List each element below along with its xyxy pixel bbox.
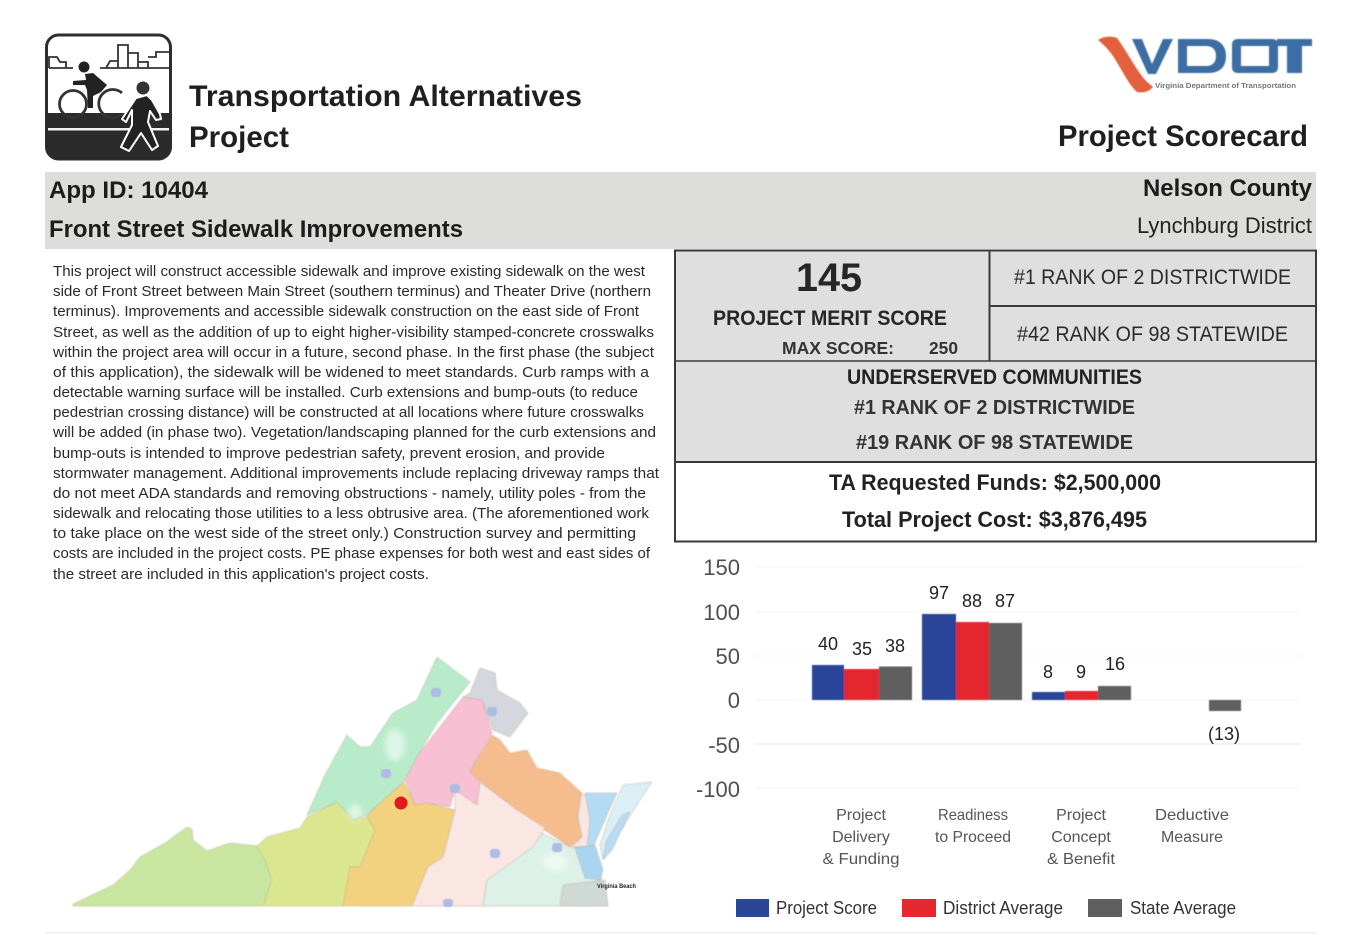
- y axis labels: 0: [728, 688, 740, 713]
- title: Transportation Alternatives: [189, 80, 582, 113]
- district: Northern Virginia: [463, 668, 528, 737]
- y axis labels: 50: [716, 644, 740, 669]
- district: Middle Peninsula strip: [572, 795, 590, 847]
- panel: score table: #1 RANK OF 2 DISTRICTWIDE: [1014, 266, 1291, 289]
- category labels: Project: [836, 807, 886, 824]
- text block: project description: to take place on the west side of the street only.) Construction survey and permitting: [53, 526, 636, 542]
- category labels: Delivery: [832, 829, 890, 846]
- district: South Hampton: [560, 880, 608, 906]
- header band: Lynchburg District: [1137, 213, 1312, 238]
- district: Lynchburg: [343, 782, 455, 906]
- text block: project description: pedestrian crossing distance) will be constructed at all locations where future crosswalks: [53, 405, 644, 421]
- value labels: 38: [885, 636, 905, 656]
- value labels: [818, 583, 1240, 744]
- text block: project description: side of Front Street between Main Street (southern terminus) and Theater Drive (northern: [53, 284, 651, 300]
- value labels: 87: [995, 591, 1015, 611]
- header band: [45, 172, 1316, 249]
- header band: App ID: 10404: [49, 177, 209, 204]
- text block: project description: will be added (in phase two). Vegetation/landscaping planned for the curb extensions and: [52, 425, 656, 441]
- title: Project: [189, 121, 289, 154]
- panel: score table: UNDERSERVED COMMUNITIES: [847, 366, 1142, 389]
- district: Eastern Shore: [600, 782, 652, 860]
- district: Richmond: [412, 782, 545, 906]
- y axis labels: -100: [696, 777, 740, 802]
- legend: District Average: [943, 898, 1063, 918]
- value labels: 8: [1043, 662, 1053, 682]
- bar chart: [696, 555, 1300, 868]
- panel: score table: MAX SCORE:: [782, 338, 894, 358]
- text block: project description: do not meet ADA standards and removing obstructions - namely, utility poles - from the: [53, 486, 646, 502]
- y axis labels: [696, 555, 740, 802]
- panel: score table: PROJECT MERIT SCORE: [713, 307, 947, 330]
- text block: project description: detectable warning surface will be installed. Curb extensions and bump-outs (to reduce: [53, 385, 638, 401]
- category labels: & Benefit: [1047, 851, 1116, 868]
- category labels: Deductive: [1155, 807, 1229, 824]
- text block: project description: stormwater management. Additional improvements include replacing driveway ramps that: [53, 466, 659, 482]
- panel: score table: TA Requested Funds: $2,500,000: [829, 470, 1161, 495]
- category labels: & Funding: [822, 851, 900, 868]
- title: [189, 80, 582, 154]
- header band: Nelson County: [1143, 175, 1313, 202]
- text block: project description: [52, 264, 659, 583]
- panel: score table: 145: [796, 256, 862, 300]
- district: Eastern Shore inlets: [603, 812, 630, 860]
- category labels: Project: [1056, 807, 1106, 824]
- category labels: Concept: [1051, 829, 1111, 846]
- district: Salem: [257, 802, 375, 906]
- category labels: Measure: [1161, 829, 1223, 846]
- y axis labels: 100: [703, 600, 740, 625]
- legend: Project Score: [776, 898, 877, 918]
- district: Hampton water: [575, 845, 603, 880]
- icon: cyclist and pedestrian: [46, 35, 171, 159]
- value labels: (13): [1208, 724, 1240, 744]
- y axis labels: -50: [708, 733, 740, 758]
- text block: project description: terminus). Improvements and accessible sidewalk construction on the east side of Front: [53, 304, 639, 320]
- value labels: 40: [818, 634, 838, 654]
- logo: VDOT: Virginia Department of Transportation: [1155, 81, 1296, 90]
- text block: project description: bump-outs is intended to improve pedestrian safety, prevent erosion, and provide: [53, 446, 605, 462]
- panel: score table: #42 RANK OF 98 STATEWIDE: [1017, 323, 1288, 346]
- district: Hampton Roads: [483, 833, 608, 906]
- value labels: 88: [962, 591, 982, 611]
- panel: score table: 250: [929, 338, 958, 358]
- route shields: [381, 688, 562, 907]
- value labels: 9: [1076, 662, 1086, 682]
- map: Virginia districts: [73, 657, 652, 907]
- value labels: 35: [852, 639, 872, 659]
- marker: project location: [394, 796, 408, 810]
- logo: VDOT: [1098, 37, 1312, 92]
- text block: project description: the street are included in this application's project costs.: [53, 567, 429, 583]
- fades: pale scan highlights: [348, 729, 567, 871]
- panel: score table: Total Project Cost: $3,876,495: [842, 507, 1147, 532]
- district: Bristol: [73, 827, 272, 906]
- panel: score table: [675, 250, 1316, 542]
- bars: [812, 614, 1241, 711]
- panel: score table: #19 RANK OF 98 STATEWIDE: [856, 432, 1133, 454]
- district: Staunton: [307, 657, 470, 820]
- text block: project description: within the project area will occur in a future, second phase. In the first phase (the subject: [52, 345, 654, 361]
- legend: [736, 898, 1236, 918]
- category labels: to Proceed: [935, 829, 1011, 846]
- legend: State Average: [1130, 898, 1236, 918]
- value labels: 16: [1105, 654, 1125, 674]
- text block: project description: of this application), the sidewalk will be widened to meet standards. Curb ramps with a: [53, 365, 649, 381]
- text block: project description: costs are included in the project costs. PE phase expenses for both west and east sides of: [53, 546, 651, 562]
- text block: project description: sidewalk and relocating those utilities to a less obtrusive area. (The aforementioned work: [53, 506, 650, 522]
- value labels: 97: [929, 583, 949, 603]
- district: Fredericksburg: [470, 735, 582, 847]
- category labels: Readiness: [938, 807, 1008, 824]
- map: Virginia districts: Virginia Beach: [597, 883, 636, 890]
- text block: project description: Street, as well as the addition of up to eight higher-visibility stamped-concrete crosswalks: [53, 325, 654, 341]
- panel: score table: #1 RANK OF 2 DISTRICTWIDE: [854, 397, 1135, 419]
- y axis labels: 150: [703, 555, 740, 580]
- text block: project description: This project will construct accessible sidewalk and improve existing sidewalk on the west: [53, 264, 645, 280]
- category labels: [822, 807, 1229, 868]
- heading: Project Scorecard: Project Scorecard: [1058, 120, 1308, 153]
- header band: Front Street Sidewalk Improvements: [49, 216, 463, 243]
- district: Culpeper: [405, 697, 492, 807]
- district: Peninsula: [585, 793, 617, 847]
